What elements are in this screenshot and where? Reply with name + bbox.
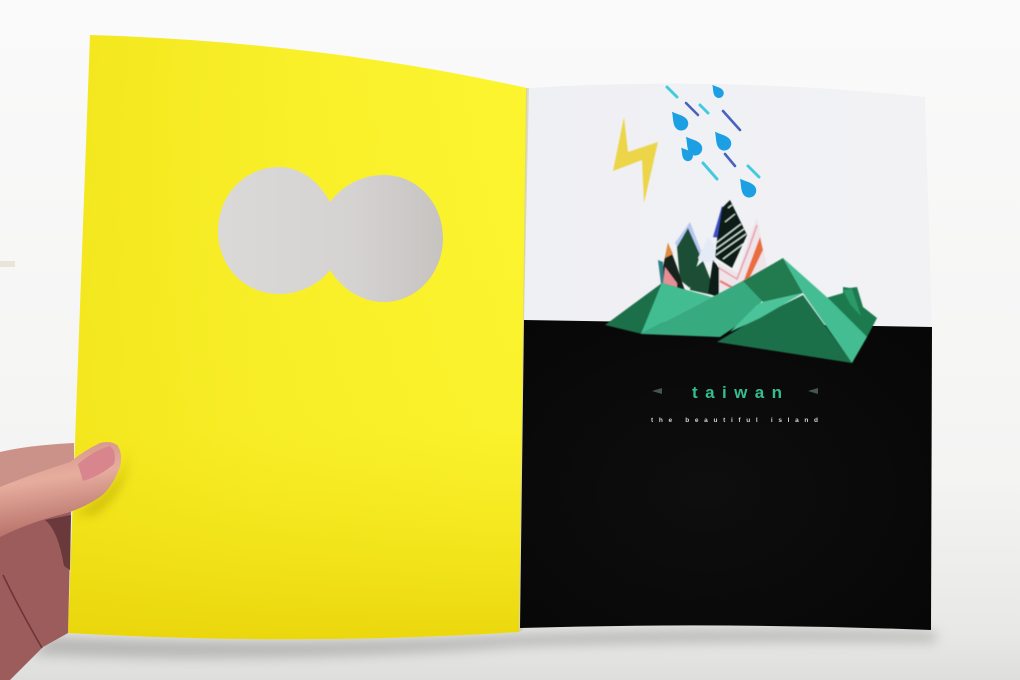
crystals bursting from the mountain	[658, 200, 767, 298]
peak highlight	[843, 289, 861, 316]
pale zigzag shard	[718, 217, 767, 296]
back finger	[0, 443, 74, 500]
title: taiwan: taiwan	[692, 383, 782, 402]
title decoration: right arrow	[808, 388, 818, 394]
rain drops and streaks	[666, 82, 759, 200]
left dark shard	[663, 243, 686, 294]
thumb nail	[78, 446, 115, 481]
lower dark sliver	[708, 260, 719, 298]
black lower page	[520, 320, 932, 630]
subtitle: the beautiful island	[651, 417, 818, 424]
yellow page	[68, 35, 527, 639]
small right peak	[826, 287, 877, 337]
icon: lightning bolt	[613, 117, 658, 203]
blue back shard	[713, 206, 727, 238]
cut-out double circle	[218, 167, 443, 302]
hand holding booklet	[0, 442, 128, 680]
mountain origami	[605, 258, 877, 363]
zigzag stripes	[719, 225, 757, 279]
thumb	[0, 442, 121, 537]
streaks cyan	[667, 87, 759, 179]
page lower shading	[68, 35, 527, 639]
pink shard	[663, 267, 677, 288]
palm shade	[45, 515, 71, 570]
teal sliver	[658, 260, 664, 284]
right page	[520, 84, 932, 630]
top dark face	[743, 258, 803, 302]
orange tip	[665, 243, 673, 258]
wall mark at left edge	[0, 261, 15, 267]
lower dark greens	[690, 261, 717, 296]
white upper page	[524, 84, 932, 328]
striped dark shard	[715, 200, 747, 268]
middle face	[641, 281, 763, 337]
streaks blue	[686, 103, 740, 166]
left page: yellow cover with cut-out	[68, 35, 527, 639]
right light band	[783, 258, 867, 363]
white center shard	[698, 237, 716, 262]
big dark face	[717, 295, 852, 363]
dark green shard	[677, 228, 700, 288]
spine shadow	[519, 88, 529, 632]
title decoration: left arrow	[652, 388, 662, 394]
left light face	[641, 283, 712, 334]
booklet shadow	[30, 629, 936, 658]
palm	[0, 510, 71, 680]
small fold	[730, 293, 803, 332]
pale blue left shard	[675, 222, 702, 270]
palm crease	[3, 575, 42, 648]
left dark face	[605, 283, 662, 334]
thumb shadow on page	[72, 448, 128, 515]
drops	[666, 82, 759, 200]
